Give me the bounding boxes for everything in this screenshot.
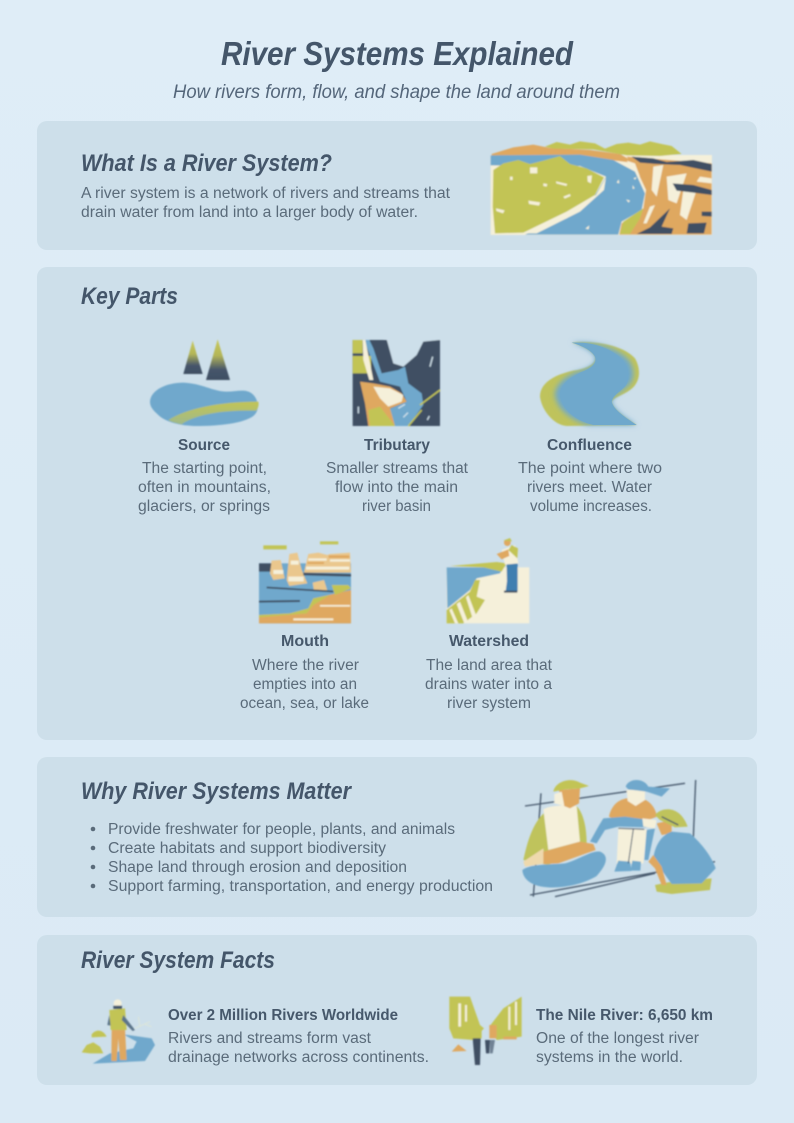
illustration: river canyon	[491, 141, 712, 235]
item: mouth	[240, 541, 369, 712]
item: tributary: river basin	[362, 498, 431, 515]
item: watershed: Watershed	[449, 633, 529, 650]
title: River Systems Explained	[221, 35, 574, 72]
item: confluence: rivers meet. Water	[527, 479, 652, 496]
item: source: glaciers, or springs	[138, 498, 270, 515]
item: tributary: Tributary	[364, 437, 430, 454]
item: tributary	[326, 339, 469, 515]
item: watershed: drains water into a	[425, 676, 552, 693]
text block: definition: drain water from land into a larger body of water.	[81, 204, 418, 221]
icon: tributary canyon	[353, 339, 440, 426]
panel: why river systems matter	[37, 757, 757, 917]
item: tributary: Smaller streams that	[326, 460, 469, 477]
subtitle: How rivers form, flow, and shape the land around them	[173, 82, 620, 103]
panel: river system facts	[37, 935, 757, 1085]
item: mouth: Mouth	[281, 633, 329, 650]
panel: what is a river system	[37, 121, 757, 250]
fact: the nile river	[449, 997, 713, 1066]
icon: river mouth with sea stacks	[259, 541, 351, 623]
item: source: often in mountains,	[138, 479, 271, 496]
text block: definition	[81, 185, 451, 221]
item: watershed: river system	[447, 695, 531, 712]
illustration: three people studying a map	[522, 780, 716, 897]
item: mouth: empties into an	[253, 676, 357, 693]
list: reasons: Provide freshwater for people, plants, and animals	[108, 821, 455, 838]
list: reasons: Create habitats and support biodiversity	[108, 840, 386, 857]
item: confluence	[518, 342, 662, 515]
item: source	[138, 339, 271, 515]
fact: two million rivers: Rivers and streams form vast	[168, 1030, 372, 1047]
fact: two million rivers: Over 2 Million Rivers Worldwide	[168, 1007, 398, 1024]
icon: hiker by stream	[82, 999, 155, 1064]
fact: the nile river: One of the longest river	[536, 1030, 699, 1047]
heading: key parts: Key Parts	[81, 283, 178, 310]
heading: river system facts: River System Facts	[81, 947, 275, 974]
icon: person on watershed cliff	[447, 538, 529, 623]
fact: the nile river: The Nile River: 6,650 km	[536, 1007, 713, 1024]
heading: what is a river system: What Is a River System?	[81, 150, 332, 177]
list: reasons: Shape land through erosion and deposition	[108, 859, 407, 876]
item: confluence: volume increases.	[530, 498, 652, 515]
item: source: Source	[178, 437, 230, 454]
icon: hikers in canyon	[449, 997, 522, 1065]
item: confluence: The point where two	[518, 460, 662, 477]
heading: why river systems matter: Why River Systems Matter	[81, 778, 352, 805]
text block: definition: A river system is a network of rivers and streams that	[81, 185, 451, 202]
list: reasons	[91, 821, 493, 895]
panel: key parts	[37, 267, 757, 740]
list: reasons: Support farming, transportation, and energy production	[108, 878, 493, 895]
item: confluence: Confluence	[547, 437, 632, 454]
icon: source lake and peaks	[150, 339, 259, 426]
icon: confluence river bend	[540, 342, 639, 426]
fact: the nile river: systems in the world.	[536, 1049, 683, 1066]
item: tributary: flow into the main	[335, 479, 458, 496]
item: watershed: The land area that	[426, 657, 553, 674]
item: mouth: Where the river	[252, 657, 359, 674]
fact: two million rivers	[82, 999, 429, 1066]
item: watershed	[425, 538, 553, 712]
item: source: The starting point,	[142, 460, 267, 477]
fact: two million rivers: drainage networks across continents.	[168, 1049, 429, 1066]
item: mouth: ocean, sea, or lake	[240, 695, 369, 712]
